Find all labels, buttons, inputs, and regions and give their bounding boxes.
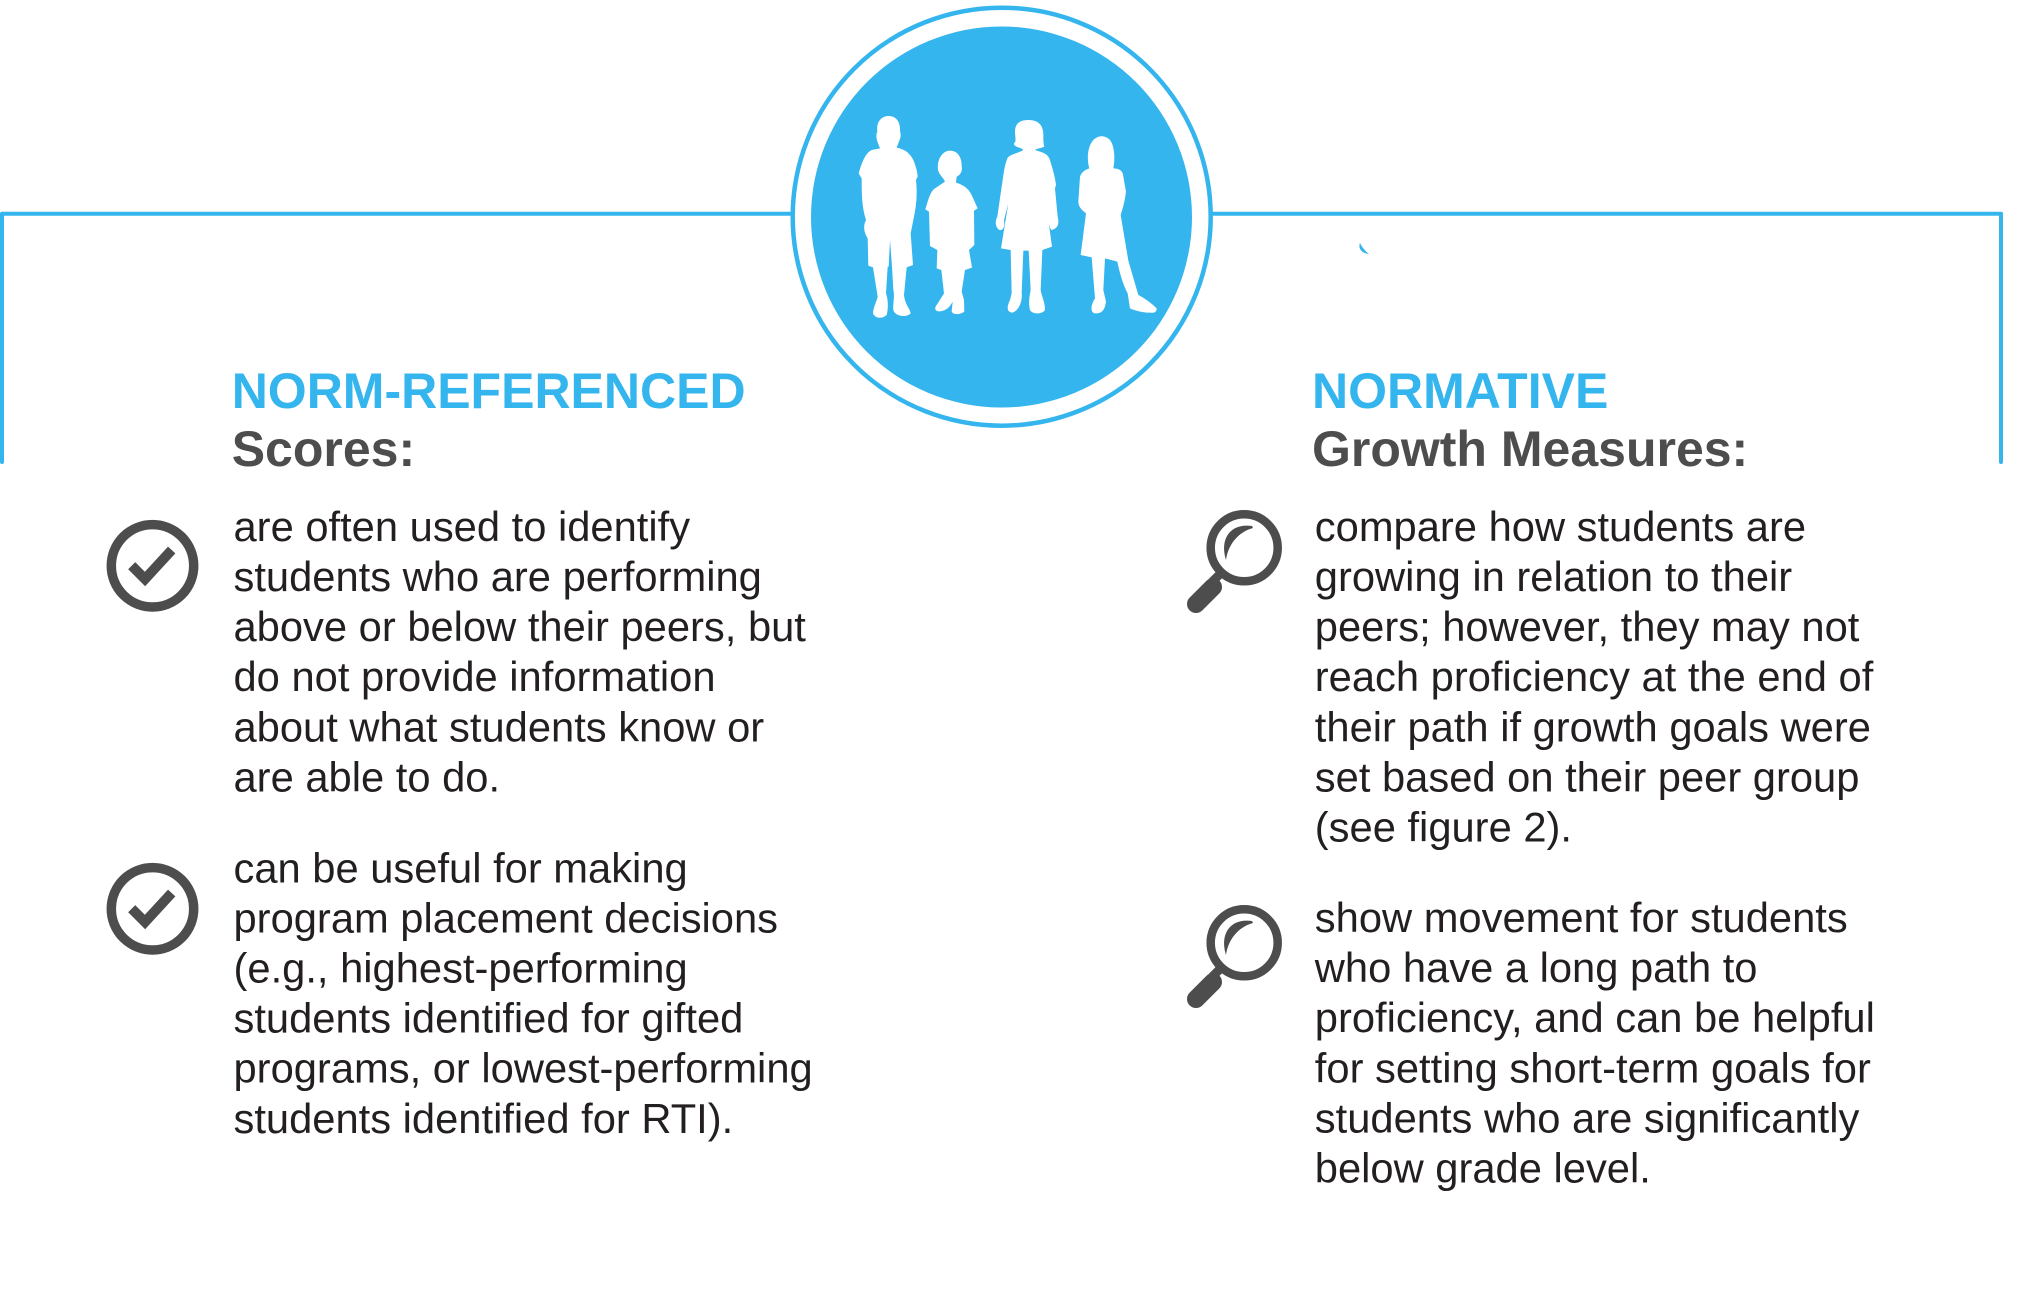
text block: magnifier item 1: (see figure 2). bbox=[1315, 804, 1572, 851]
heading: scores: Scores: bbox=[232, 421, 415, 477]
child 3 bbox=[996, 120, 1058, 313]
child 2 bbox=[925, 151, 978, 314]
text block: magnifier item 2: who have a long path to bbox=[1314, 944, 1757, 991]
right bracket line bbox=[1212, 214, 2001, 462]
text block: check item 1 bbox=[234, 503, 806, 800]
text block: check item 2: students identified for gifted bbox=[234, 995, 743, 1042]
text block: check item 2 bbox=[234, 844, 813, 1142]
text block: check item 1: do not provide information bbox=[234, 653, 716, 700]
text block: magnifier item 2: students who are significantly bbox=[1315, 1094, 1859, 1142]
text block: check item 1: about what students know or bbox=[234, 703, 764, 750]
text block: check item 2: (e.g., highest-performing bbox=[234, 945, 688, 992]
text block: check item 1: are often used to identify bbox=[234, 503, 690, 550]
icon: magnifier 1 bbox=[1196, 514, 1278, 604]
text block: magnifier item 1 bbox=[1315, 503, 1874, 851]
text block: magnifier item 2 bbox=[1314, 894, 1875, 1192]
text block: check item 1: students who are performing bbox=[234, 553, 762, 600]
text block: magnifier item 1: their path if growth goals were bbox=[1315, 703, 1871, 750]
text block: check item 2: programs, or lowest-performing bbox=[234, 1045, 813, 1092]
panel: normative growth measures bbox=[1196, 363, 1875, 1192]
heading: growth measures: Growth Measures: bbox=[1312, 421, 1748, 477]
icon: magnifier 2 bbox=[1196, 909, 1278, 999]
child 4 bbox=[1078, 136, 1157, 313]
text block: check item 2: can be useful for making bbox=[234, 844, 688, 892]
text block: check item 1: above or below their peers, but bbox=[234, 603, 806, 650]
text block: magnifier item 2: show movement for students bbox=[1315, 894, 1848, 941]
child 1 bbox=[859, 116, 918, 318]
central circle with children silhouettes bbox=[793, 8, 1211, 426]
heading: norm-referenced: NORM-REFERENCED bbox=[232, 363, 746, 419]
outer ring bbox=[793, 8, 1211, 426]
text block: magnifier item 1: reach proficiency at the end of bbox=[1315, 653, 1874, 700]
icon: four children silhouettes bbox=[859, 116, 1157, 318]
text block: magnifier item 1: peers; however, they may not bbox=[1315, 603, 1860, 650]
text block: magnifier item 2: for setting short-term goals for bbox=[1315, 1044, 1871, 1091]
inner disc bbox=[811, 26, 1192, 408]
text block: magnifier item 2: proficiency, and can be helpful bbox=[1315, 994, 1875, 1041]
text block: magnifier item 1: compare how students are bbox=[1315, 503, 1806, 550]
panel: norm-referenced scores bbox=[111, 363, 813, 1142]
icon: check mark 2 bbox=[111, 868, 194, 950]
text block: check item 1: are able to do. bbox=[234, 754, 500, 800]
text block: check item 2: program placement decisions bbox=[234, 894, 778, 942]
icon: small blue mark bbox=[1359, 243, 1369, 254]
heading: normative: NORMATIVE bbox=[1312, 363, 1608, 419]
icon: check mark 1 bbox=[111, 525, 194, 607]
left bracket line bbox=[2, 214, 802, 462]
text block: magnifier item 1: growing in relation to their bbox=[1315, 553, 1792, 600]
text block: magnifier item 1: set based on their peer group bbox=[1315, 754, 1859, 800]
text block: check item 2: students identified for RTI). bbox=[234, 1095, 733, 1142]
text block: magnifier item 2: below grade level. bbox=[1315, 1145, 1651, 1192]
